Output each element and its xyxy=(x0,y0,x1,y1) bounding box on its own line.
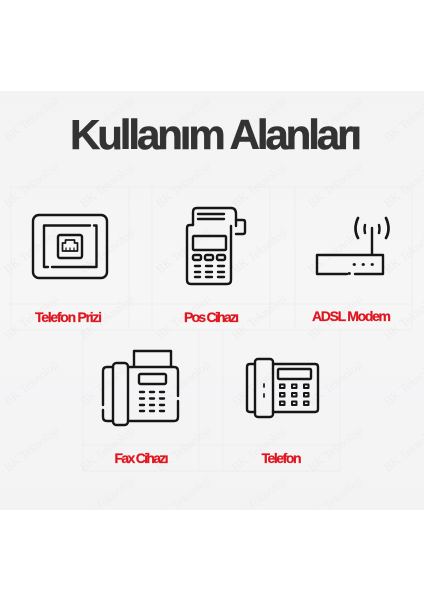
watermark: BK Teknoloji xyxy=(305,291,366,342)
watermark: BK Teknoloji xyxy=(1,93,62,144)
label: fax cihazı: Fax Cihazı xyxy=(114,450,168,466)
watermark: BK Teknoloji xyxy=(77,291,138,342)
watermark: BK Teknoloji xyxy=(305,93,366,144)
watermark: BK Teknoloji xyxy=(305,473,366,524)
watermark: BK Teknoloji xyxy=(1,291,62,342)
watermark: BK Teknoloji xyxy=(1,225,62,276)
watermark: BK Teknoloji xyxy=(153,225,214,276)
watermark: BK Teknoloji xyxy=(229,357,290,408)
watermark: BK Teknoloji xyxy=(77,225,138,276)
watermark: BK Teknoloji xyxy=(1,159,62,210)
watermark: BK Teknoloji xyxy=(1,357,62,408)
background panel xyxy=(0,91,424,510)
watermark: BK Teknoloji xyxy=(77,473,138,524)
watermark: BK Teknoloji xyxy=(229,473,290,524)
watermark: BK Teknoloji xyxy=(77,357,138,408)
label: telefon: Telefon xyxy=(262,450,302,466)
watermark: BK Teknoloji xyxy=(1,423,62,474)
watermark xyxy=(1,93,424,524)
icon: telefon xyxy=(247,359,318,417)
watermark: BK Teknoloji xyxy=(305,357,366,408)
title: Kullanım Alanları xyxy=(70,111,362,158)
label: pos cihazı: Pos Cihazı xyxy=(184,309,239,325)
watermark: BK Teknoloji xyxy=(153,473,214,524)
watermark: BK Teknoloji xyxy=(77,423,138,474)
label: adsl modem: ADSL Modem xyxy=(312,308,391,324)
watermark: BK Teknoloji xyxy=(153,291,214,342)
watermark: BK Teknoloji xyxy=(77,93,138,144)
watermark: BK Teknoloji xyxy=(305,159,366,210)
watermark: BK Teknoloji xyxy=(77,159,138,210)
watermark: BK Teknoloji xyxy=(153,357,214,408)
watermark: BK Teknoloji xyxy=(229,159,290,210)
watermark: BK Teknoloji xyxy=(305,423,366,474)
watermark: BK Teknoloji xyxy=(229,225,290,276)
watermark: BK Teknoloji xyxy=(153,93,214,144)
icon: fax cihazı xyxy=(103,351,178,425)
watermark: BK Teknoloji xyxy=(229,423,290,474)
icon: telefon prizi xyxy=(33,215,107,278)
watermark: BK Teknoloji xyxy=(305,225,366,276)
watermark: BK Teknoloji xyxy=(153,159,214,210)
icon: adsl modem xyxy=(317,218,388,274)
watermark: BK Teknoloji xyxy=(153,423,214,474)
watermark: BK Teknoloji xyxy=(229,93,290,144)
label: telefon prizi: Telefon Prizi xyxy=(35,309,102,325)
icon: pos cihazı xyxy=(187,208,245,284)
watermark: BK Teknoloji xyxy=(229,291,290,342)
